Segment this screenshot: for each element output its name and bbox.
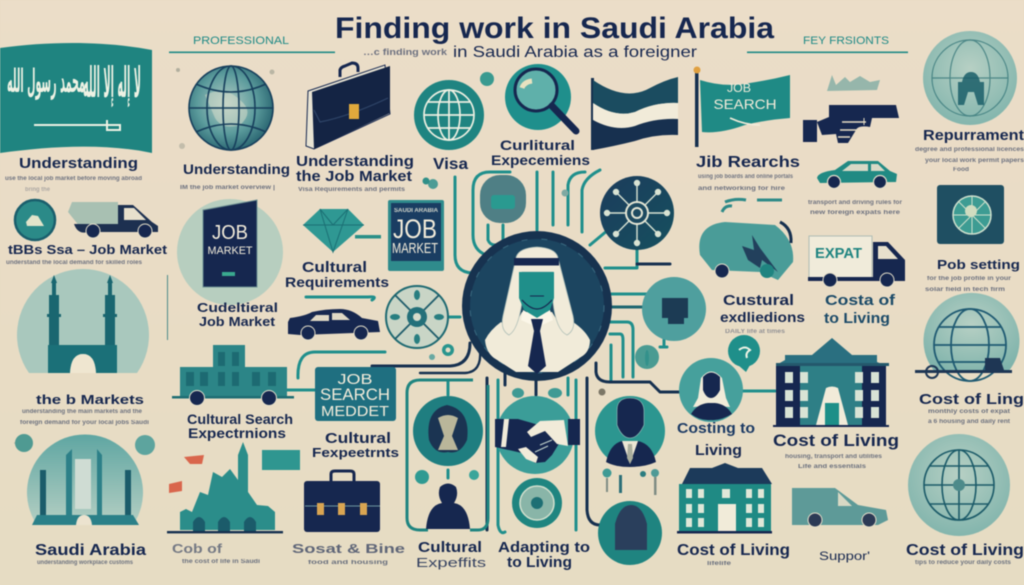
- icon: expat truck: EXPAT: [815, 245, 862, 262]
- icon: small dot: [480, 72, 494, 86]
- text block: monthly costs of expat: [928, 409, 1010, 415]
- panel: cultural benefits frame: Expeffits: [416, 555, 487, 570]
- text block: use the local job market before moving abroad: [5, 176, 142, 182]
- panel: understanding globe: [180, 66, 290, 191]
- panel: mosque markets: foreign demand for your local jobs Saudi: [20, 420, 149, 426]
- text: costs of living: Costa of: [825, 292, 896, 309]
- panel: castle: [167, 442, 300, 565]
- heading: Cost of Living: [677, 542, 790, 559]
- heading: Curlitural: [500, 137, 575, 153]
- flag script: محمد رسول الله: [7, 63, 85, 101]
- icon: globe: [908, 434, 1010, 536]
- heading: Jib Rearchs: [696, 154, 800, 171]
- subtitle: in Saudi Arabia as a foreigner: [453, 44, 698, 61]
- text block: for the job profile in your: [927, 276, 1012, 282]
- text: لا إله إلا الله: [83, 59, 141, 108]
- panel: big building: [773, 338, 899, 470]
- heading: Cultural Search: [187, 411, 293, 427]
- icon: truck: [68, 202, 158, 238]
- icon: house: [677, 463, 772, 534]
- icon: central expat figure: [462, 231, 612, 381]
- icon: teal van illustration: [699, 199, 793, 280]
- icon: hooded figure: [598, 501, 662, 565]
- heading: Understanding: [19, 155, 138, 172]
- icon: job market card: [388, 200, 444, 271]
- panel: mosque markets: [17, 269, 149, 426]
- text block: degree and professional licences: [915, 147, 1024, 153]
- frame: [407, 380, 488, 530]
- icon: globe and truck: [915, 293, 1020, 381]
- headdress: [502, 247, 574, 335]
- icon: dark car: [288, 309, 380, 340]
- heading: Sosat & Bine: [292, 542, 405, 556]
- network connector lines: [286, 170, 775, 533]
- panel: cost of living globe with truck: [915, 293, 1024, 425]
- text: costs of living: to Living: [824, 311, 890, 327]
- face and neck: [519, 272, 554, 318]
- icon: man in suit: [595, 396, 665, 467]
- panel: cultural search: Expectrnions: [188, 425, 286, 441]
- icon: job market card: JOB: [393, 214, 437, 244]
- panel: costing living: [677, 358, 755, 459]
- panel: teal car: [808, 161, 903, 216]
- text block: the cost of life in Saudi: [182, 559, 260, 565]
- panel: requirements: [915, 31, 1024, 173]
- panel: job market left: [6, 200, 168, 266]
- heading: Custural: [723, 293, 794, 309]
- icon: portrait: [413, 396, 483, 466]
- scattered small dots and pins: [14, 68, 659, 495]
- icon: flag: [694, 66, 790, 147]
- panel: magnifier: [491, 64, 590, 168]
- icon: network hub: [600, 176, 674, 250]
- heading: Repurrament: [923, 127, 1024, 144]
- icon: visa globe: [414, 80, 484, 150]
- text block: IM the job market overview |: [180, 185, 275, 191]
- flag script: [7, 59, 141, 108]
- heading: Cost of Living: [773, 431, 899, 450]
- heading: tBBs Ssa – Job Market: [8, 242, 168, 257]
- icon: central small blob: [480, 175, 526, 223]
- card: job search: SEARCH: [320, 385, 390, 404]
- panel: visa: [414, 72, 494, 173]
- panel: cultural search: [172, 345, 294, 441]
- heading: Cost of Living: [906, 542, 1024, 559]
- icon: ring dial: [512, 478, 562, 528]
- text block: understanding workplace customs: [37, 560, 134, 566]
- text block: food and housing: [308, 560, 389, 566]
- panel: saudi flag: [0, 43, 152, 193]
- panel: job settings: solar field in tech firm: [925, 287, 1005, 293]
- icon: speech pin: [728, 335, 760, 372]
- panel: big building: Life and essentials: [798, 464, 867, 470]
- heading: the b Markets: [36, 392, 144, 407]
- text block: understanding the main markets and the: [22, 409, 143, 415]
- icon: woman portrait: [679, 358, 743, 422]
- text block: Visa Requirements and permits: [298, 187, 406, 193]
- icon: person: [426, 484, 470, 529]
- panel: job search flag: and networking for hire: [698, 186, 786, 192]
- icon: small teal disc: [635, 345, 659, 369]
- icon: expat truck: [808, 236, 905, 287]
- panel: requirements: Food: [953, 167, 969, 173]
- panel: teal car: new foreign expats here: [810, 210, 901, 216]
- text block: DAILY life at times: [725, 329, 786, 335]
- panel: cultural benefits frame: [407, 380, 488, 570]
- shoulders: [485, 312, 590, 372]
- icon: building: [773, 338, 889, 427]
- panel: job settings: [925, 185, 1020, 293]
- heading: Cudeltieral: [197, 300, 278, 315]
- icon: globe: [189, 66, 273, 150]
- panel: requirements: your local work permit papers: [925, 158, 1024, 164]
- icon: flag: SEARCH: [714, 96, 776, 112]
- icon: job book: MARKET: [208, 245, 253, 257]
- card: job search: [315, 367, 396, 421]
- panel: briefcase: [296, 63, 414, 193]
- icon: city circle: [27, 434, 143, 525]
- panel: second briefcase: [292, 471, 405, 566]
- text line: bring the: [25, 187, 51, 193]
- icon: car: [817, 161, 897, 188]
- panel: magnifier: Expecemiens: [491, 152, 590, 168]
- text block: lifelife: [707, 561, 732, 567]
- icon: blurred skyline: [827, 75, 880, 91]
- subtitle: [363, 44, 698, 61]
- icon: van: [792, 488, 888, 527]
- divider: [167, 275, 168, 340]
- panel: job search flag: [694, 66, 800, 192]
- icon: sword: [34, 120, 120, 130]
- panel: cultural requirements: [285, 209, 389, 290]
- icon: globe: [923, 31, 1017, 125]
- panel: green house: [677, 463, 790, 567]
- icon: job book: JOB: [212, 222, 248, 244]
- panel: job book: Job Market: [199, 314, 276, 329]
- icon: flag: [0, 43, 152, 153]
- heading: Costing to: [677, 421, 755, 437]
- text block: housing, transport and utilities: [785, 454, 883, 460]
- icon: diamond: [303, 209, 381, 252]
- panel: handshake: [495, 396, 590, 571]
- heading: Cultural: [302, 259, 367, 276]
- panel: cost of living globe: [906, 434, 1024, 566]
- heading: Pob setting: [937, 257, 1020, 272]
- heading: Saudi Arabia: [35, 542, 146, 559]
- text block: transport and driving rules for: [808, 200, 903, 206]
- panel: costing living: Living: [695, 443, 742, 459]
- panel: handshake: to Living: [507, 555, 572, 571]
- collar: [521, 310, 553, 326]
- heading: Understanding: [296, 153, 414, 170]
- text block: using job boards and online portals: [698, 174, 794, 180]
- card: job search: MEDDET: [321, 403, 389, 420]
- icon: small globes: [15, 434, 155, 455]
- icon: screen: [937, 185, 1004, 244]
- section label: professional: PROFESSIONAL: [193, 35, 289, 47]
- icon: monitor badge: [642, 277, 706, 341]
- heading: Cob of: [172, 541, 223, 556]
- tie: [528, 319, 546, 374]
- heading: Understanding: [183, 162, 290, 177]
- icon: magnifying glass: [505, 64, 576, 131]
- card: job search: JOB: [338, 371, 372, 388]
- icon: job market card: SAUDI ARABIA: [394, 208, 439, 214]
- text: costs of living: [824, 292, 896, 327]
- icon: job book: [177, 199, 283, 305]
- panel: support van: [792, 488, 888, 563]
- heading: Cultural: [418, 540, 482, 556]
- text: cultural expectations: Cultural: [325, 431, 391, 447]
- icon: briefcase: [304, 471, 380, 532]
- title: Finding work in Saudi Arabia: [335, 12, 774, 45]
- icon: small dots: [415, 470, 479, 484]
- icon: briefcase: [306, 63, 390, 149]
- icon: map badge: [15, 200, 55, 240]
- icon: building on wheels: [172, 345, 294, 406]
- heading: Cost of Ling: [919, 391, 1024, 408]
- panel: cultural requirements: Requirements: [285, 274, 389, 290]
- heading: Adapting to: [498, 540, 590, 556]
- text: cultural expectations: Fexpeetrnts: [312, 445, 399, 460]
- heading: Suppor': [819, 551, 870, 563]
- icon: flag: JOB: [727, 81, 751, 95]
- section label: key resources: FEY FRSIONTS: [803, 35, 889, 47]
- panel: job book: [177, 199, 283, 329]
- heading: Visa: [433, 156, 468, 173]
- text block: tips to reduce your daily costs: [915, 560, 1012, 566]
- text block: understand the local demand for skilled roles: [6, 260, 143, 266]
- icon: mosque circle: [17, 269, 149, 373]
- panel: saudi arabia: [27, 434, 146, 566]
- icon: job market card: MARKET: [392, 240, 438, 257]
- icon: castle and flags: [167, 442, 300, 533]
- panel: cost of living globe with truck: a 6 housing and daily rent: [928, 419, 1010, 425]
- icon: handshake: [495, 396, 580, 474]
- icon: spoked wheel: [386, 286, 448, 348]
- subtitle: …c finding work: [363, 47, 448, 57]
- panel: custural expectations: [720, 293, 805, 335]
- panel: custural expectations: exdliedions: [720, 310, 805, 325]
- panel: briefcase: the Job Market: [296, 168, 412, 185]
- icon: pistol: [803, 105, 899, 143]
- text: cultural expectations: [312, 431, 399, 460]
- icon: striped flag: [591, 77, 678, 150]
